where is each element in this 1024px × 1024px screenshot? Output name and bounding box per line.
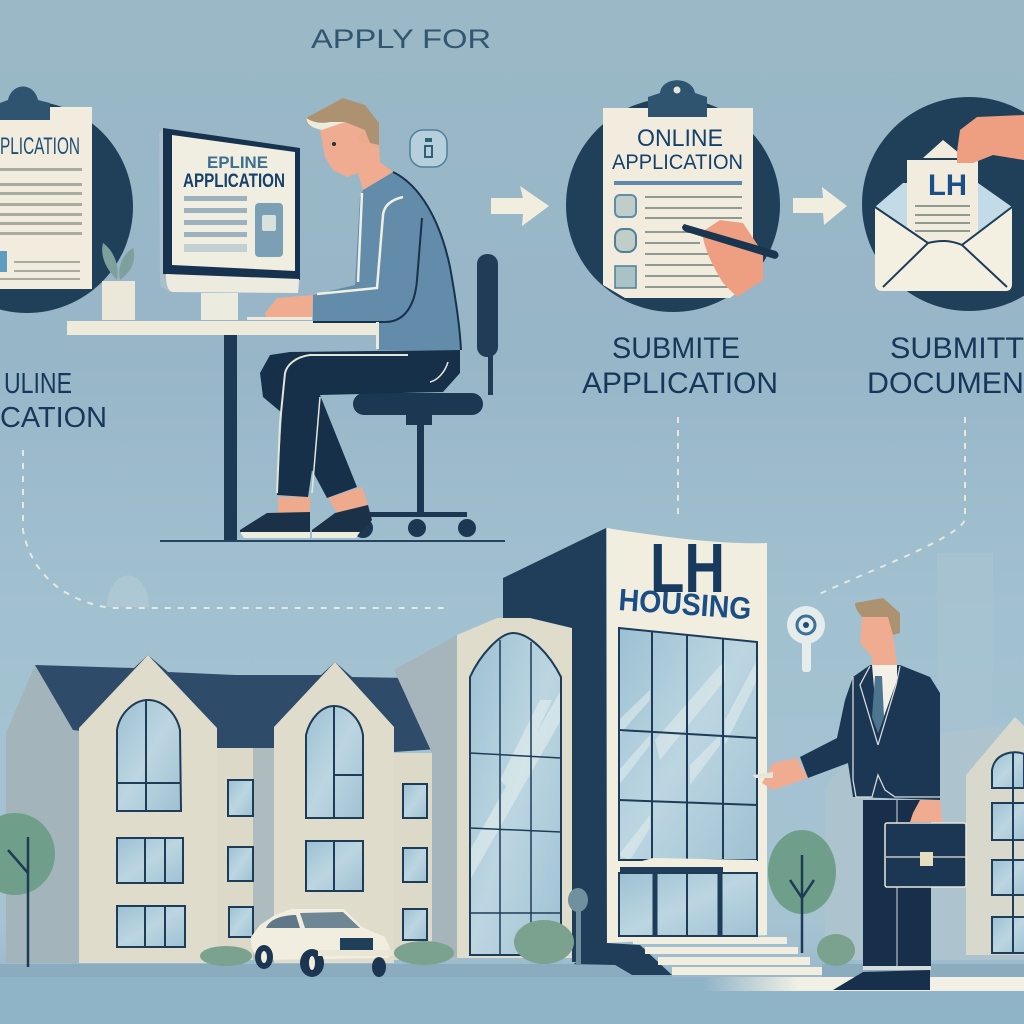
neck and head <box>320 122 393 190</box>
icon: monitor: EPLINE <box>207 153 268 172</box>
panel: submit documents step <box>862 97 1024 400</box>
bushes <box>200 920 855 966</box>
icon: monitor <box>159 128 300 320</box>
side wall <box>6 665 79 963</box>
building: LH housing tower <box>503 528 822 975</box>
icon: monitor: APPLICATION <box>183 171 285 192</box>
legs <box>260 350 460 498</box>
ankles and shoes <box>278 497 310 514</box>
icon: key location badge <box>787 606 825 672</box>
steps <box>633 937 787 944</box>
jacket <box>800 665 940 800</box>
building: apartment house <box>6 655 457 963</box>
icon: potted plant <box>102 243 135 320</box>
sign text: LH <box>650 529 725 607</box>
icon: envelope: LH <box>928 169 967 202</box>
label: submit documents: DOCUMEN <box>867 367 1024 400</box>
icon: clipboard <box>603 80 753 298</box>
windows <box>117 700 427 947</box>
torso <box>313 172 461 350</box>
icon: hand with pen <box>682 220 779 297</box>
icon: clipboard: ONLINE <box>637 125 723 152</box>
icon: small lock badge <box>410 130 447 167</box>
label: online application: ULINE <box>4 368 72 400</box>
building: LH housing tower: HOUSING <box>618 582 753 626</box>
heading: apply for: APPLY FOR <box>311 24 491 54</box>
icon: clipboard: PLICATION <box>0 133 80 160</box>
head <box>860 617 897 665</box>
street lamp <box>568 888 588 965</box>
chair <box>353 254 498 538</box>
label: submit application: APPLICATION <box>582 367 778 400</box>
icon: dark circle <box>566 98 780 312</box>
arrow 2 <box>793 187 847 225</box>
dark base <box>572 943 672 975</box>
illustration: person at computer desk <box>67 98 505 542</box>
briefcase <box>910 800 942 822</box>
glass curtain wall <box>619 628 757 860</box>
keyboard and hand <box>247 317 312 320</box>
tree: left <box>0 813 55 967</box>
icon: dark circle <box>0 101 133 313</box>
panel: submit application step <box>566 80 780 400</box>
entrance <box>620 858 757 867</box>
icon: dark circle <box>862 97 1024 311</box>
icon: car <box>251 909 393 977</box>
floor line <box>160 540 505 542</box>
connector: dashed lines <box>23 417 965 608</box>
legs <box>863 800 931 968</box>
label: submit application: SUBMITE <box>612 332 740 365</box>
label: online application: CATION <box>0 402 107 434</box>
panel: online application step (left, cropped) <box>0 86 133 434</box>
ground <box>0 964 1024 977</box>
roof <box>35 655 453 752</box>
icon: hand <box>957 115 1024 163</box>
hand <box>762 758 808 790</box>
walls <box>217 748 253 960</box>
desk <box>67 321 376 335</box>
icon: envelope <box>875 140 1012 291</box>
tree: right <box>768 830 836 953</box>
icon: clipboard: APPLICATION <box>612 151 743 174</box>
faint sun <box>107 576 149 607</box>
faint background tower <box>937 553 993 727</box>
icon: clipboard <box>0 86 92 289</box>
building: curved glass block <box>394 618 572 958</box>
person <box>240 98 461 538</box>
building: right background house <box>825 717 1024 960</box>
arrow 1 <box>491 186 549 226</box>
figure: agent in suit <box>753 598 966 990</box>
label: submit documents: SUBMITT <box>890 332 1024 365</box>
